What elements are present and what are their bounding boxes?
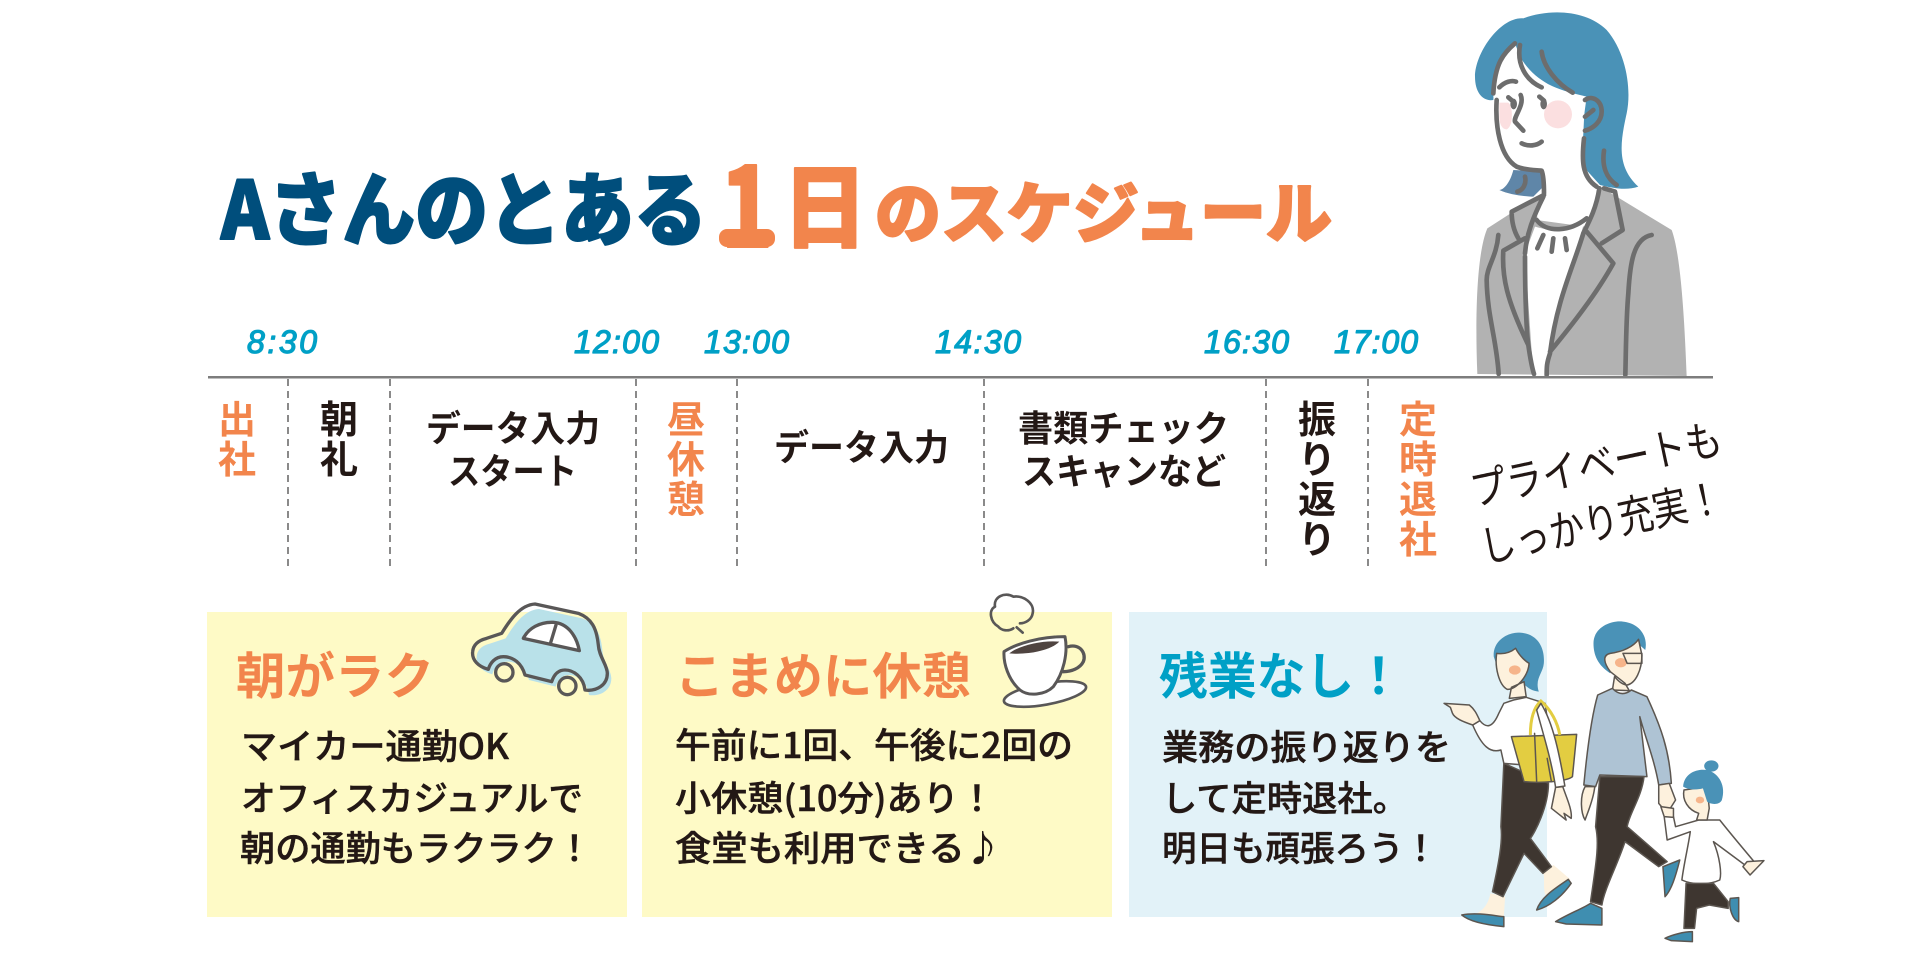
time labels: 17:00 — [1334, 324, 1418, 360]
schedule: 出社: 社 — [218, 429, 256, 484]
schedule: 朝礼: 礼 — [320, 429, 358, 484]
figure: woman — [1444, 633, 1577, 927]
time labels: 14:30 — [935, 324, 1021, 360]
icon: car — [473, 604, 611, 695]
panel: 残業なし！ — [1129, 612, 1547, 917]
timeline axis — [208, 376, 1713, 378]
body text: オフィスカジュアルで — [241, 771, 583, 822]
schedule: 昼休憩: 休 — [667, 429, 705, 484]
body text: マイカー通勤OK — [241, 719, 510, 770]
body text: 食堂も利用できる♪ — [675, 821, 1001, 872]
schedule: 定時退社: 社 — [1399, 509, 1437, 564]
schedule: データ入力スタート — [426, 400, 600, 495]
body text: 小休憩(10分)あり！ — [675, 771, 995, 822]
schedule: データ入力スタート: データ入力 — [426, 400, 600, 452]
timeline dashed dividers — [288, 379, 1368, 567]
schedule: 定時退社: 定 — [1399, 389, 1437, 444]
schedule: 昼休憩: 憩 — [667, 469, 705, 524]
title — [220, 119, 1332, 279]
icon: coffee cup — [991, 595, 1088, 712]
schedule: 振り返り — [1298, 389, 1336, 564]
schedule: 書類チェックスキャンなど — [1018, 400, 1229, 495]
time labels: 12:00 — [574, 324, 659, 360]
schedule: 定時退社: 時 — [1399, 429, 1437, 484]
schedule: 昼休憩: 昼 — [667, 389, 705, 444]
body text: 業務の振り返りを — [1162, 720, 1451, 771]
body text — [675, 718, 1073, 872]
figure: man — [1556, 621, 1680, 925]
schedule: 振り返り: 振 — [1298, 389, 1336, 444]
time labels: 8:30 — [247, 324, 317, 360]
schedule: 昼休憩 — [667, 389, 705, 524]
schedule: データ入力スタート: スタート — [448, 443, 577, 495]
schedule: 朝礼 — [320, 389, 358, 484]
time labels: 13:00 — [704, 324, 789, 360]
heading: 残業なし！: 残業なし！ — [1159, 637, 1403, 709]
schedule: 振り返り: 返 — [1298, 469, 1336, 524]
schedule: 朝礼: 朝 — [320, 389, 358, 444]
title part: Aさんのとある: Aさんのとある — [220, 147, 707, 263]
time labels: 16:30 — [1204, 324, 1289, 360]
heading: こまめに休憩: こまめに休憩 — [675, 637, 971, 709]
schedule: 定時退社 — [1399, 389, 1437, 564]
schedule: 定時退社: 退 — [1399, 469, 1437, 524]
illustration: woman in jacket — [1475, 12, 1687, 376]
figure: child — [1661, 760, 1764, 942]
body text — [240, 719, 592, 872]
body text: 朝の通勤もラクラク！ — [240, 821, 592, 872]
schedule: データ入力: データ入力 — [774, 419, 949, 471]
body text — [1162, 720, 1451, 872]
time labels — [247, 324, 1418, 360]
schedule: 出社: 出 — [218, 389, 256, 444]
body text: 午前に1回、午後に2回の — [675, 718, 1073, 769]
title part: 1日 — [719, 119, 867, 279]
title part: 1日: 日 — [783, 136, 867, 266]
title part: 1日: 1 — [721, 119, 773, 279]
handwritten note: しっかり充実！ — [1474, 464, 1727, 576]
schedule: 書類チェックスキャンなど: スキャンなど — [1022, 443, 1226, 495]
schedule: 書類チェックスキャンなど: 書類チェック — [1018, 400, 1229, 452]
panel: 朝がラク — [207, 604, 627, 917]
illustration: walking family — [1444, 621, 1764, 942]
schedule: 振り返り: り — [1298, 429, 1336, 484]
panel: こまめに休憩 — [642, 595, 1112, 917]
title part: のスケジュール: のスケジュール — [875, 161, 1332, 257]
schedule: 振り返り: り — [1298, 509, 1336, 564]
handwritten note: プライベートも — [1464, 405, 1727, 519]
handwritten note — [1464, 405, 1727, 576]
heading: 朝がラク: 朝がラク — [236, 637, 434, 709]
schedule: 出社 — [218, 389, 256, 484]
body text: 明日も頑張ろう！ — [1162, 821, 1438, 872]
body text: して定時退社。 — [1162, 771, 1408, 822]
